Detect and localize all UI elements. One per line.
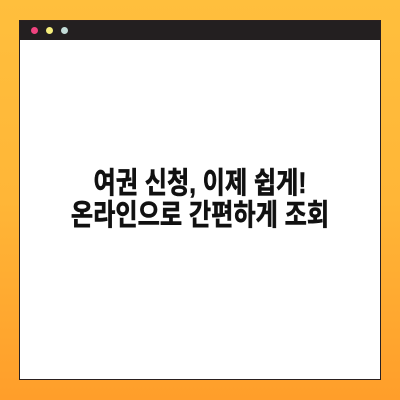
- title bar: [20, 21, 380, 40]
- icon: yellow window dot: [46, 27, 53, 34]
- icon: pale blue window dot: [61, 27, 68, 34]
- title: [71, 166, 329, 232]
- title: 온라인으로 간편하게 조회: [71, 199, 329, 232]
- title: 여권 신청, 이제 쉽게!: [94, 166, 306, 200]
- icon: pink window dot: [30, 27, 38, 34]
